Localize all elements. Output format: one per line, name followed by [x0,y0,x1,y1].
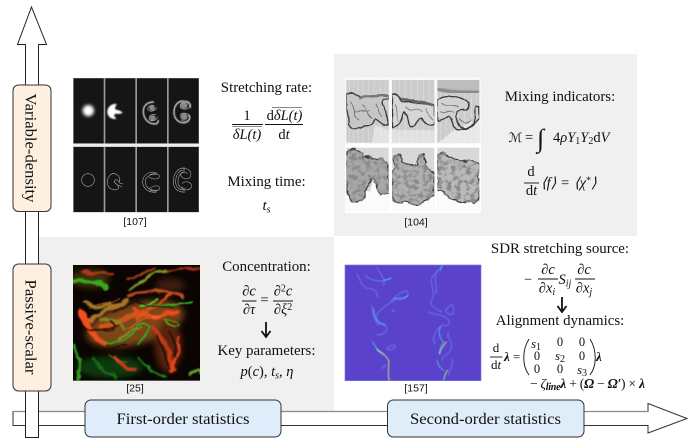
image: vortex ring density panels [107] [73,78,199,212]
formula: mixing rate [524,164,597,199]
formula: alignment dynamics matrix equation: d [493,340,500,355]
caption: [157]: [157] [404,382,428,394]
formula: mixing indicator integral: ∫ [535,124,546,154]
formula: alignment dynamics matrix equation: 3 [582,368,587,379]
formula: alignment dynamics matrix equation: 0 [557,362,563,376]
label box: Second-order statistics: Second-order statistics [410,411,561,428]
formula: SDR stretching source term [524,262,595,298]
formula: concentration diffusion equation: ∂τ [243,302,256,318]
formula: alignment dynamics matrix equation: − ζ [530,376,546,391]
arrow: vertical axis [18,7,46,438]
formula: mixing rate: ⟩ [591,176,597,192]
formula: mixing indicator integral: Y [580,130,590,146]
label box: First-order statistics: First-order statistics [116,411,250,428]
formula: mixing indicator integral: 1 [575,136,580,147]
formula: SDR stretching source term: − [524,272,532,288]
text: Mixing indicators: Mixing indicators: [505,89,615,105]
formula: SDR stretching source term: ∂x [539,280,552,296]
formula: alignment dynamics matrix equation: 0 [534,362,540,376]
formula: concentration diffusion equation: 2 [281,284,286,294]
formula: alignment dynamics matrix equation: line [546,382,561,393]
formula: mixing indicator integral: 4ρY [553,130,575,146]
image: turbulent flame panels [104] [345,77,481,213]
label box: Passive-scalar [13,264,51,391]
formula: SDR stretching source term: j [587,287,592,298]
formula: alignment dynamics matrix equation: + (Ω − Ω′) × λ [569,376,645,391]
formula: mixing rate: = [561,176,569,192]
image: red and green scalar field [25] [70,265,200,381]
formula: key parameter symbols: s [275,370,279,382]
formula: stretching rate [232,108,303,143]
formula: concentration diffusion equation: ∂c [242,284,256,300]
arrow: concentration to key parameters [262,322,270,337]
formula: mixing indicator integral: d [593,130,601,146]
label box: Variable-density [13,85,51,212]
formula: alignment dynamics matrix equation: 0 [557,335,563,349]
formula: mixing indicator integral [508,124,612,154]
formula: mixing indicator integral: 2 [588,136,593,147]
formula: mixing rate: * [586,176,591,186]
formula: SDR stretching source term: ∂c [541,262,555,278]
formula: mixing indicator integral: = [525,130,533,146]
formula: alignment dynamics matrix equation: s [577,363,582,377]
formula: alignment dynamics matrix equation: = [513,349,520,364]
formula: alignment dynamics matrix equation: 0 [579,349,585,363]
formula: SDR stretching source term: ∂x [576,280,589,296]
formula: concentration diffusion equation: ∂ [274,284,281,300]
formula: stretching rate: 1 [243,108,251,124]
formula: mixing rate: dt [526,183,538,199]
formula: concentration diffusion equation: c [286,284,293,300]
formula: key parameter symbols: , [279,364,283,380]
label box: Variable-density: Variable-density [22,93,38,203]
formula: SDR stretching source term: ij [566,278,572,290]
label box: First-order statistics [85,400,281,437]
formula: alignment dynamics matrix equation: 1 [536,342,541,353]
arrow: horizontal axis [13,404,687,433]
formula: alignment dynamics matrix equation: 0 [579,335,585,349]
text: Mixing time: Mixing time: [227,174,306,190]
soft colour regions [70,269,189,378]
formula: key parameter symbols: p(c), t [240,364,275,380]
image: blue scalar dissipation field [157] [345,265,481,381]
formula: mixing indicator integral: V [601,130,609,146]
formula: alignment dynamics matrix equation [490,335,645,393]
panel: passive-scalar first-order background [39,237,334,412]
formula: concentration diffusion equation: ∂ξ [274,302,287,318]
text: Alignment dynamics: Alignment dynamics: [496,313,624,329]
formula: mixing time symbol: s [267,204,271,216]
formula: stretching rate: dδL(t) [267,108,303,124]
formula: SDR stretching source term: i [552,287,555,298]
caption: [25]: [25] [126,382,144,394]
text: Concentration: Concentration: [222,259,311,275]
panel: variable-density second-order background [334,54,637,236]
formula: concentration diffusion equation: = [260,292,269,308]
text: Stretching rate: Stretching rate: [221,80,312,96]
formula: key parameter symbols: η [286,364,294,380]
text: SDR stretching source: SDR stretching source: [491,241,629,257]
formula: SDR stretching source term: S [558,272,566,288]
text: Key parameters: Key parameters: [218,343,315,359]
formula: alignment dynamics matrix equation: s [531,337,536,351]
formula: concentration diffusion equation [242,284,293,318]
formula: mixing rate: ⟨χ [574,176,586,192]
formula: mixing time symbol: t [262,198,267,214]
formula: alignment dynamics matrix equation: λ [503,349,510,364]
formula: SDR stretching source term: ∂c [577,262,591,278]
formula: mixing indicator integral: ℳ [508,131,522,146]
formula: alignment dynamics matrix equation: 2 [560,354,565,365]
formula: stretching rate: dt [278,127,291,143]
formula: alignment dynamics matrix equation: 0 [534,349,540,363]
formula: concentration diffusion equation: 2 [287,302,292,313]
label box: Second-order statistics [388,400,584,437]
label box: Passive-scalar: Passive-scalar [22,280,38,374]
formula: alignment dynamics matrix equation: λ [595,349,602,364]
formula: stretching rate: δL(t) [233,127,261,143]
arrow: SDR to alignment dynamics [558,297,566,312]
caption: [104]: [104] [404,216,428,228]
formula: mixing rate: d [527,164,535,180]
formula: mixing rate: ⟨f⟩ [541,176,557,192]
caption: [107]: [107] [123,216,147,228]
bright lower zones [346,118,479,210]
formula: alignment dynamics matrix equation: dt [491,357,501,372]
formula: alignment dynamics matrix equation: λ [559,376,566,391]
formula: alignment dynamics matrix equation: s [555,349,560,363]
